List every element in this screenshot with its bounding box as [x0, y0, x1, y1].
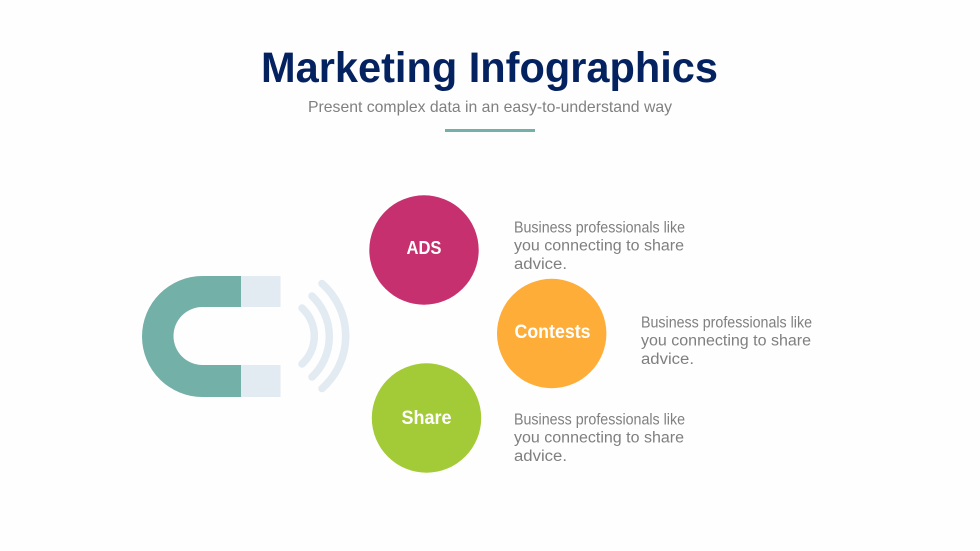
magnet top tip: [241, 276, 280, 307]
text: ADS description: advice.: [514, 256, 567, 273]
circle: ADS: [369, 195, 479, 305]
text: Share description: you connecting to share: [514, 430, 684, 446]
magnet bottom tip: [241, 365, 280, 397]
icon: magnet: [142, 276, 280, 397]
text: Share description: [514, 412, 685, 465]
text: Share description: Business professionals like: [514, 412, 685, 428]
text: Contests description: Business professionals like: [641, 314, 812, 332]
text: ADS description: Business professionals like: [514, 220, 685, 236]
text: ADS description: [514, 220, 685, 273]
subtitle: Present complex data in an easy-to-understand way: [308, 99, 672, 116]
circle: Share: Share: [402, 408, 452, 429]
text: ADS description: you connecting to share: [514, 238, 684, 254]
text: Share description: advice.: [514, 448, 567, 465]
circle: Share: [372, 363, 481, 473]
circle: ADS: ADS: [406, 238, 442, 258]
magnet body: [142, 276, 241, 397]
text: Contests description: advice.: [641, 351, 694, 368]
text: Contests description: [641, 314, 812, 368]
title underline: [445, 129, 535, 132]
icon: magnetic waves: [302, 284, 346, 388]
circle: Contests: Contests: [514, 322, 590, 343]
title: Marketing Infographics: [261, 44, 718, 92]
text: Contests description: you connecting to share: [641, 332, 811, 350]
circle: Contests: [497, 279, 606, 388]
